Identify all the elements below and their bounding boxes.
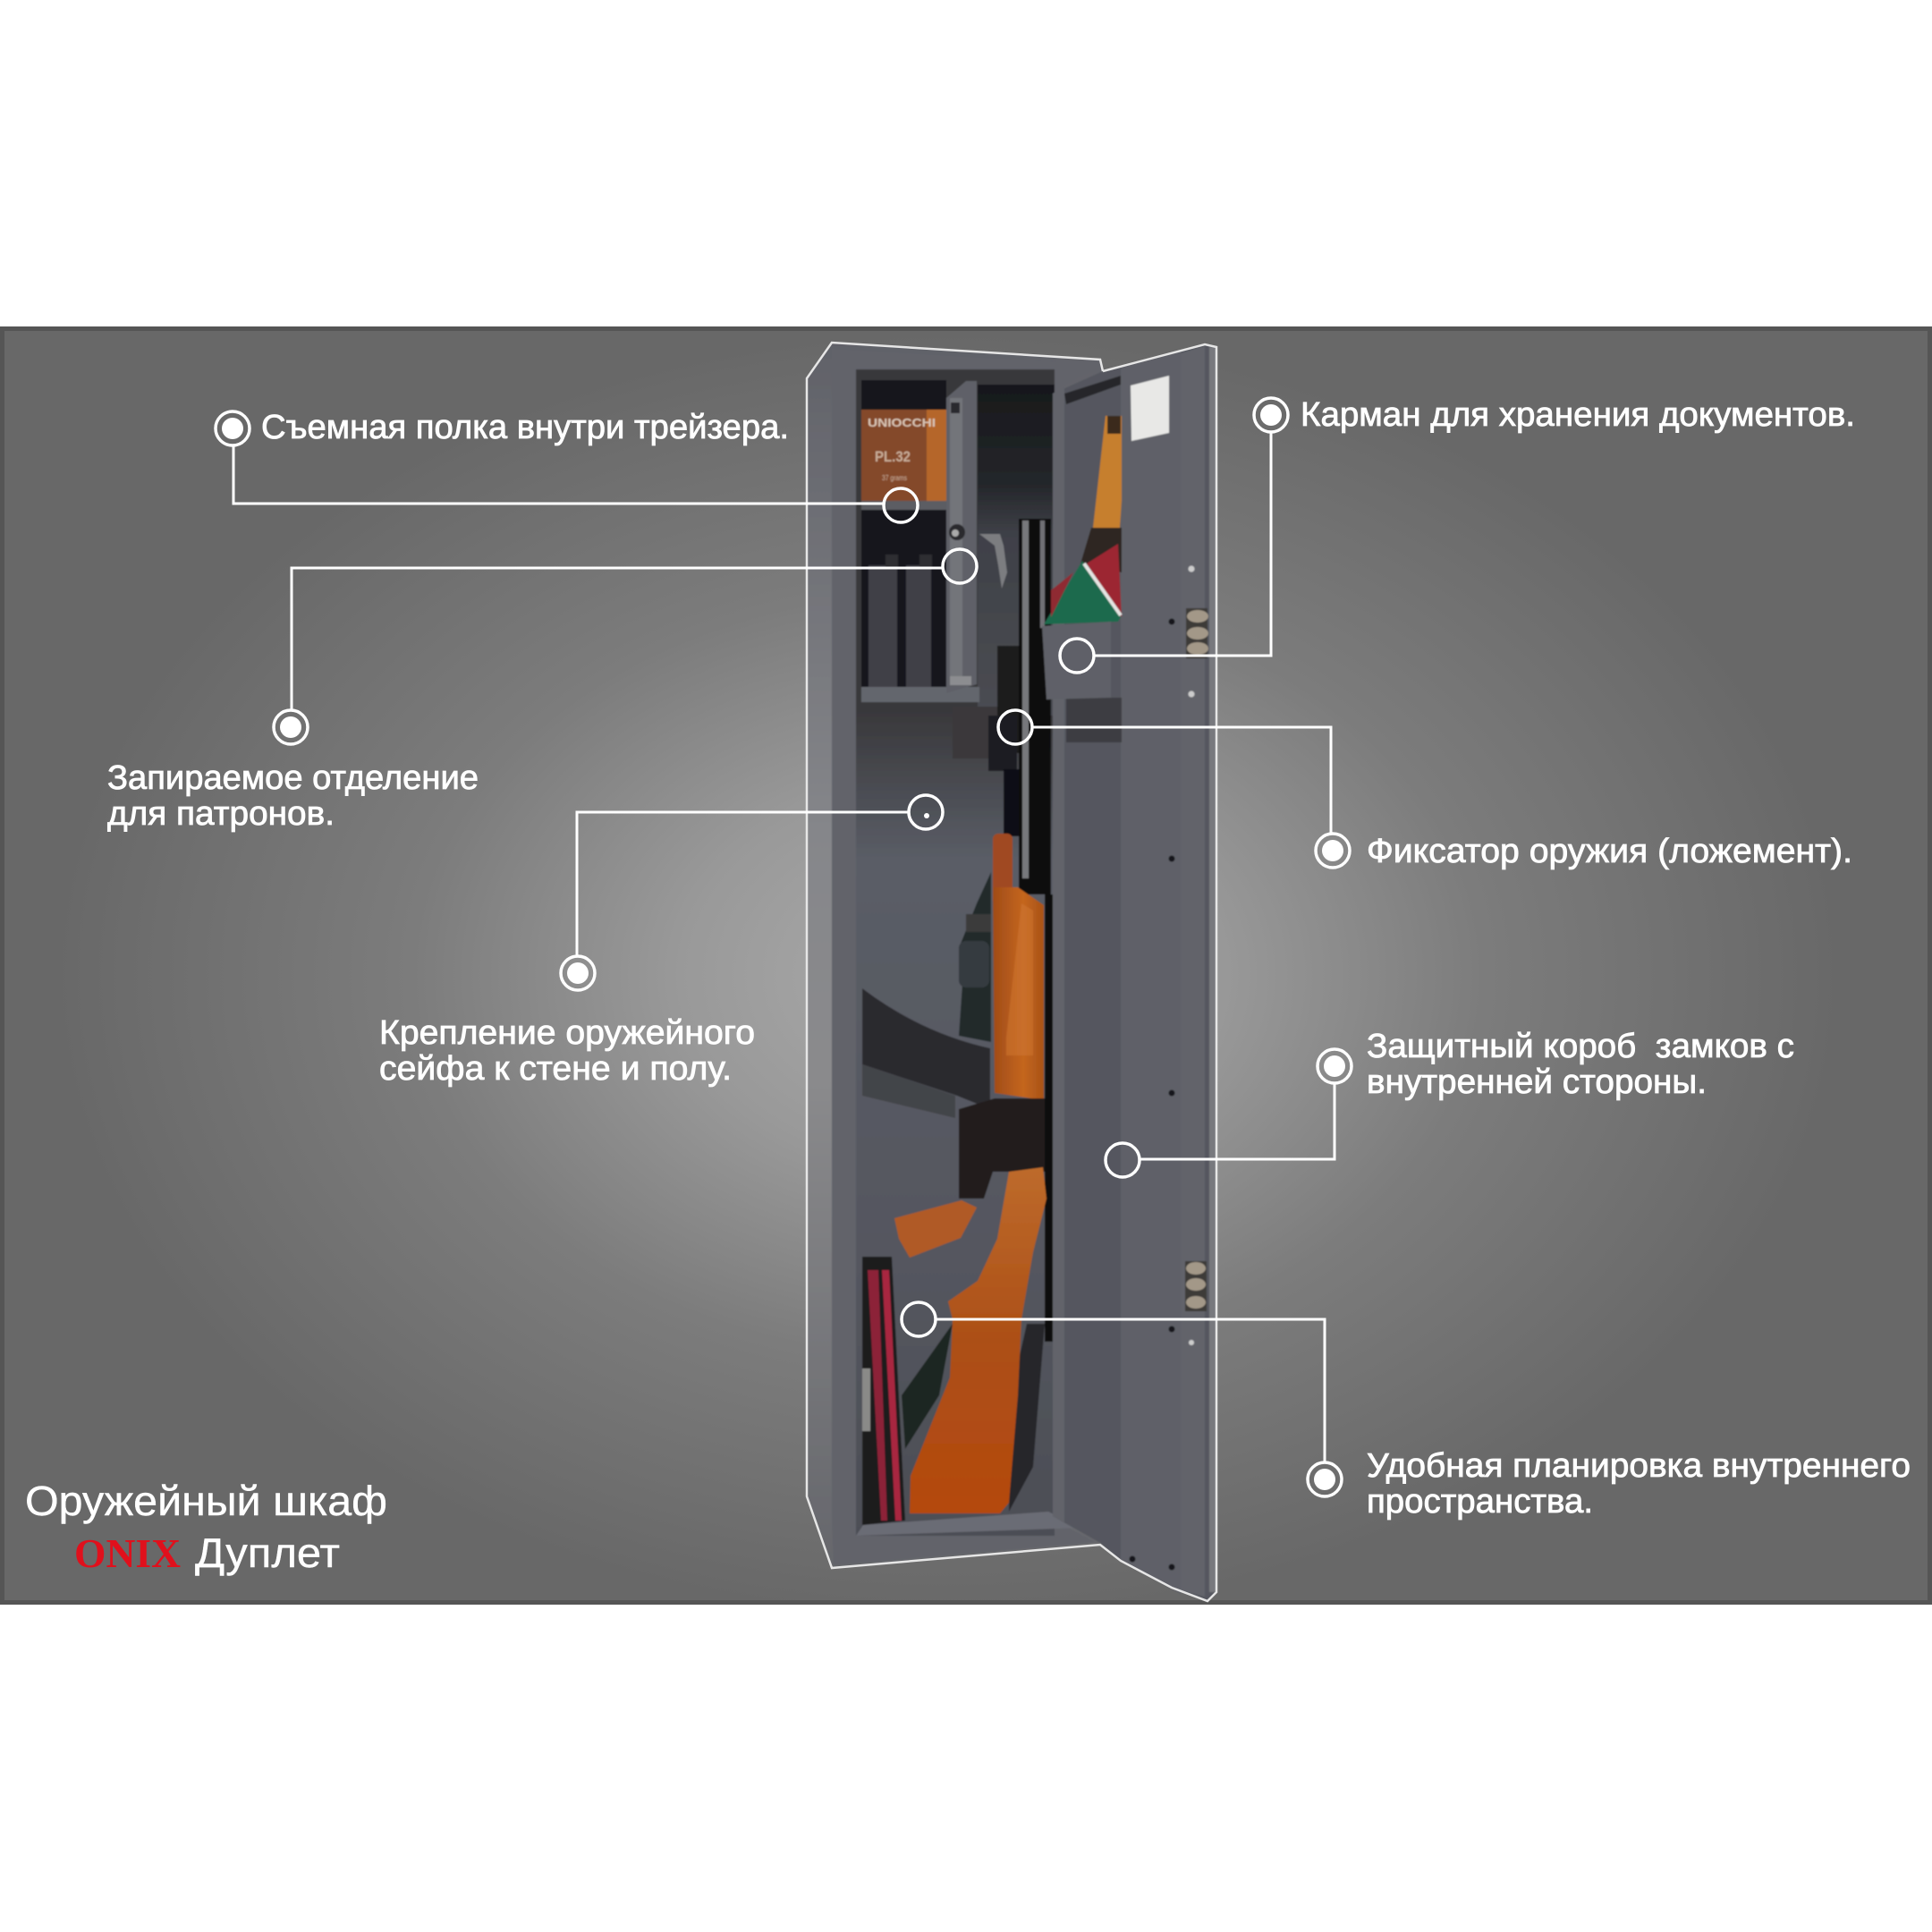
callout: protective lock box: Защитный короб замков с	[1367, 1028, 1794, 1065]
top dark right compartment	[978, 385, 1055, 716]
callout: wall and floor mounting: сейфа к стене и полу.	[379, 1050, 732, 1088]
title: product name: ONIX	[74, 1530, 181, 1576]
callout: interior layout: Удобная планировка внутреннего	[1367, 1447, 1911, 1485]
cartridge box on shelf	[861, 410, 946, 503]
callout: lockable ammo compartment: для патронов.	[107, 795, 335, 833]
safe white outline	[807, 343, 1216, 1601]
callout: wall and floor mounting	[379, 795, 943, 1088]
title: product name: Дуплет	[195, 1530, 340, 1576]
gun rest block	[953, 707, 1008, 758]
document pocket	[1042, 622, 1111, 699]
trayser bottom shelf	[861, 687, 979, 702]
callout: lockable ammo compartment: Запираемое отделение	[107, 759, 479, 797]
lower rifle forend	[993, 834, 1044, 1100]
stock shadow	[1009, 1324, 1045, 1512]
removable shelf	[861, 501, 946, 510]
title: product name	[25, 1478, 387, 1576]
panel: grey background	[0, 326, 1932, 1605]
door rivets	[1129, 565, 1195, 1571]
callout: document pocket: Карман для хранения документов.	[1301, 396, 1855, 434]
trayser open door	[946, 381, 977, 693]
magazines	[869, 555, 932, 687]
rifle stock	[910, 1167, 1046, 1513]
callout: removable shelf	[216, 409, 918, 522]
cartridge box on shelf: UNIOCCHI	[868, 416, 936, 429]
cleaning kit case	[862, 1257, 905, 1525]
keys	[979, 534, 1007, 589]
document pocket contents	[1044, 416, 1122, 624]
black gap beside rifle	[1045, 894, 1053, 1342]
callout: lockable ammo compartment	[107, 549, 977, 833]
rifle barrels	[988, 519, 1051, 894]
cartridge box on shelf: PL.32	[875, 448, 911, 465]
instruction sheet	[1131, 376, 1169, 441]
strap under stock	[902, 1324, 953, 1449]
callout: weapon retainer: Фиксатор оружия (ложемент).	[1367, 833, 1852, 870]
cartridge box on shelf: 37 grams	[882, 474, 907, 482]
callout: document pocket	[1060, 396, 1855, 673]
sling	[862, 988, 990, 1109]
title: product name: Оружейный шкаф	[25, 1478, 387, 1524]
callout: wall and floor mounting: Крепление оружейного	[379, 1014, 755, 1052]
receiver	[959, 1098, 1045, 1199]
callout: removable shelf: Съемная полка внутри трейзера.	[261, 409, 789, 446]
callout: protective lock box	[1106, 1028, 1794, 1177]
callout: interior layout	[902, 1302, 1911, 1521]
safe door	[1053, 344, 1216, 1601]
upper inner recess	[856, 369, 1055, 1536]
shadow under sling	[862, 1064, 955, 1118]
safe front frame	[832, 349, 1100, 1565]
trayser compartment	[861, 380, 946, 689]
pistol grip	[894, 1200, 977, 1258]
upper locking bolts	[1186, 608, 1208, 658]
lower locking bolts	[1185, 1261, 1207, 1311]
lower sill	[856, 1512, 1082, 1536]
callout: interior layout: пространства.	[1367, 1483, 1593, 1521]
safe body	[807, 343, 1103, 1568]
gun safe illustration	[807, 343, 1216, 1601]
sling attachment	[959, 872, 991, 1042]
callout: protective lock box: внутренней стороны.	[1367, 1063, 1707, 1101]
callout: weapon retainer	[998, 710, 1852, 870]
